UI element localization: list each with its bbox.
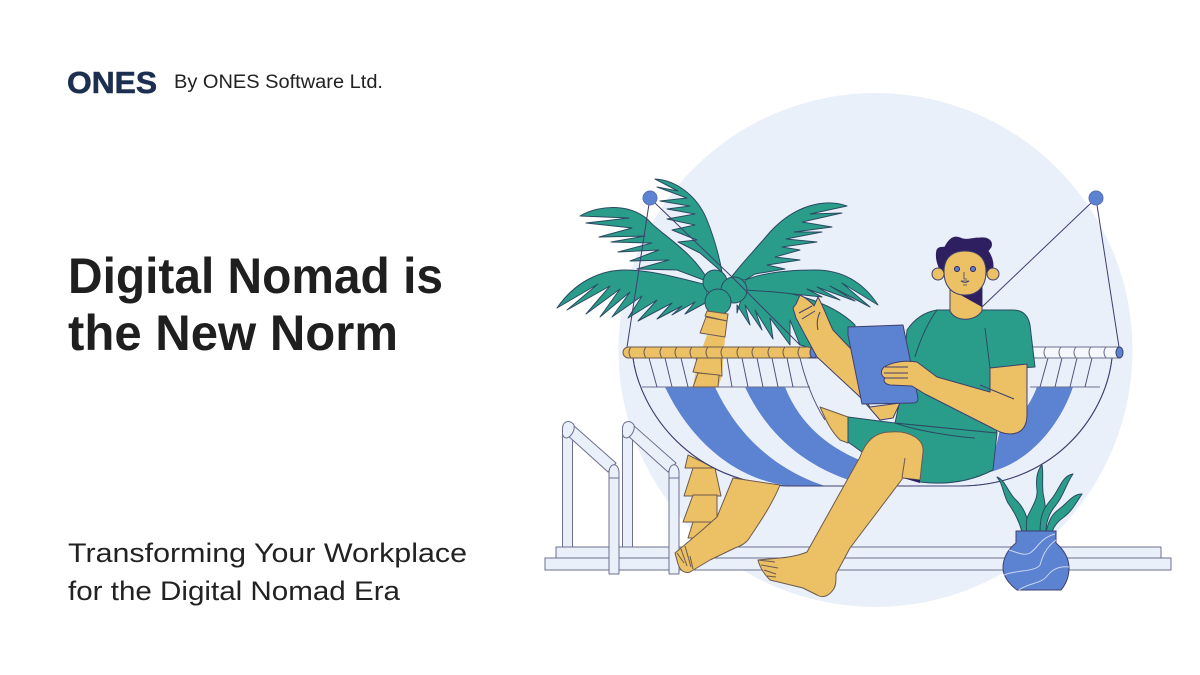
hammock cords <box>627 203 1119 347</box>
plant pot <box>1003 531 1069 590</box>
palm fronds <box>557 179 878 360</box>
coconuts <box>703 270 747 315</box>
background circle <box>618 93 1132 607</box>
title <box>68 248 443 361</box>
man: underside shadow <box>903 478 920 483</box>
cord anchor left <box>643 191 657 205</box>
illustration: digital nomad in hammock <box>545 179 1171 597</box>
right hammock bar <box>1030 347 1123 358</box>
man: right arm and gripping hand <box>881 361 1027 434</box>
logo: ONES: ONES <box>67 65 157 100</box>
man: fingers <box>884 367 1014 399</box>
man: shorts belt line <box>895 423 975 438</box>
man: back thigh <box>820 407 848 443</box>
man: ears <box>932 268 999 280</box>
subtitle: Transforming Your Workplace <box>68 538 467 568</box>
man: front toes <box>758 458 905 577</box>
subtitle <box>68 538 467 606</box>
pool rails <box>562 422 679 574</box>
steps <box>545 547 1171 570</box>
man: nose and mouth <box>961 272 969 285</box>
man: raised arm and hand <box>793 295 900 420</box>
hammock body <box>633 358 1112 486</box>
palm trunk lower <box>683 455 721 538</box>
title: Digital Nomad is <box>68 248 443 304</box>
man: shirt <box>895 310 1035 433</box>
byline: By ONES Software Ltd. <box>174 72 383 93</box>
man: face <box>944 251 986 295</box>
left hammock bar <box>623 347 817 358</box>
man: back leg <box>675 478 780 573</box>
man: neck shadow <box>957 288 982 307</box>
palm trunk upper <box>693 311 728 387</box>
subtitle: for the Digital Nomad Era <box>68 576 401 606</box>
man: neck <box>950 287 982 319</box>
title: the New Norm <box>68 305 398 361</box>
man: eyes <box>954 266 976 272</box>
man: hair <box>936 237 993 272</box>
man: shorts <box>848 417 997 483</box>
man: front leg <box>758 432 923 597</box>
man: back foot toes <box>677 546 693 569</box>
cord anchor right <box>1089 191 1103 205</box>
man: sleeve crease <box>915 310 990 368</box>
tablet <box>848 325 918 404</box>
plant <box>997 465 1082 532</box>
man: palm creases <box>799 306 820 330</box>
